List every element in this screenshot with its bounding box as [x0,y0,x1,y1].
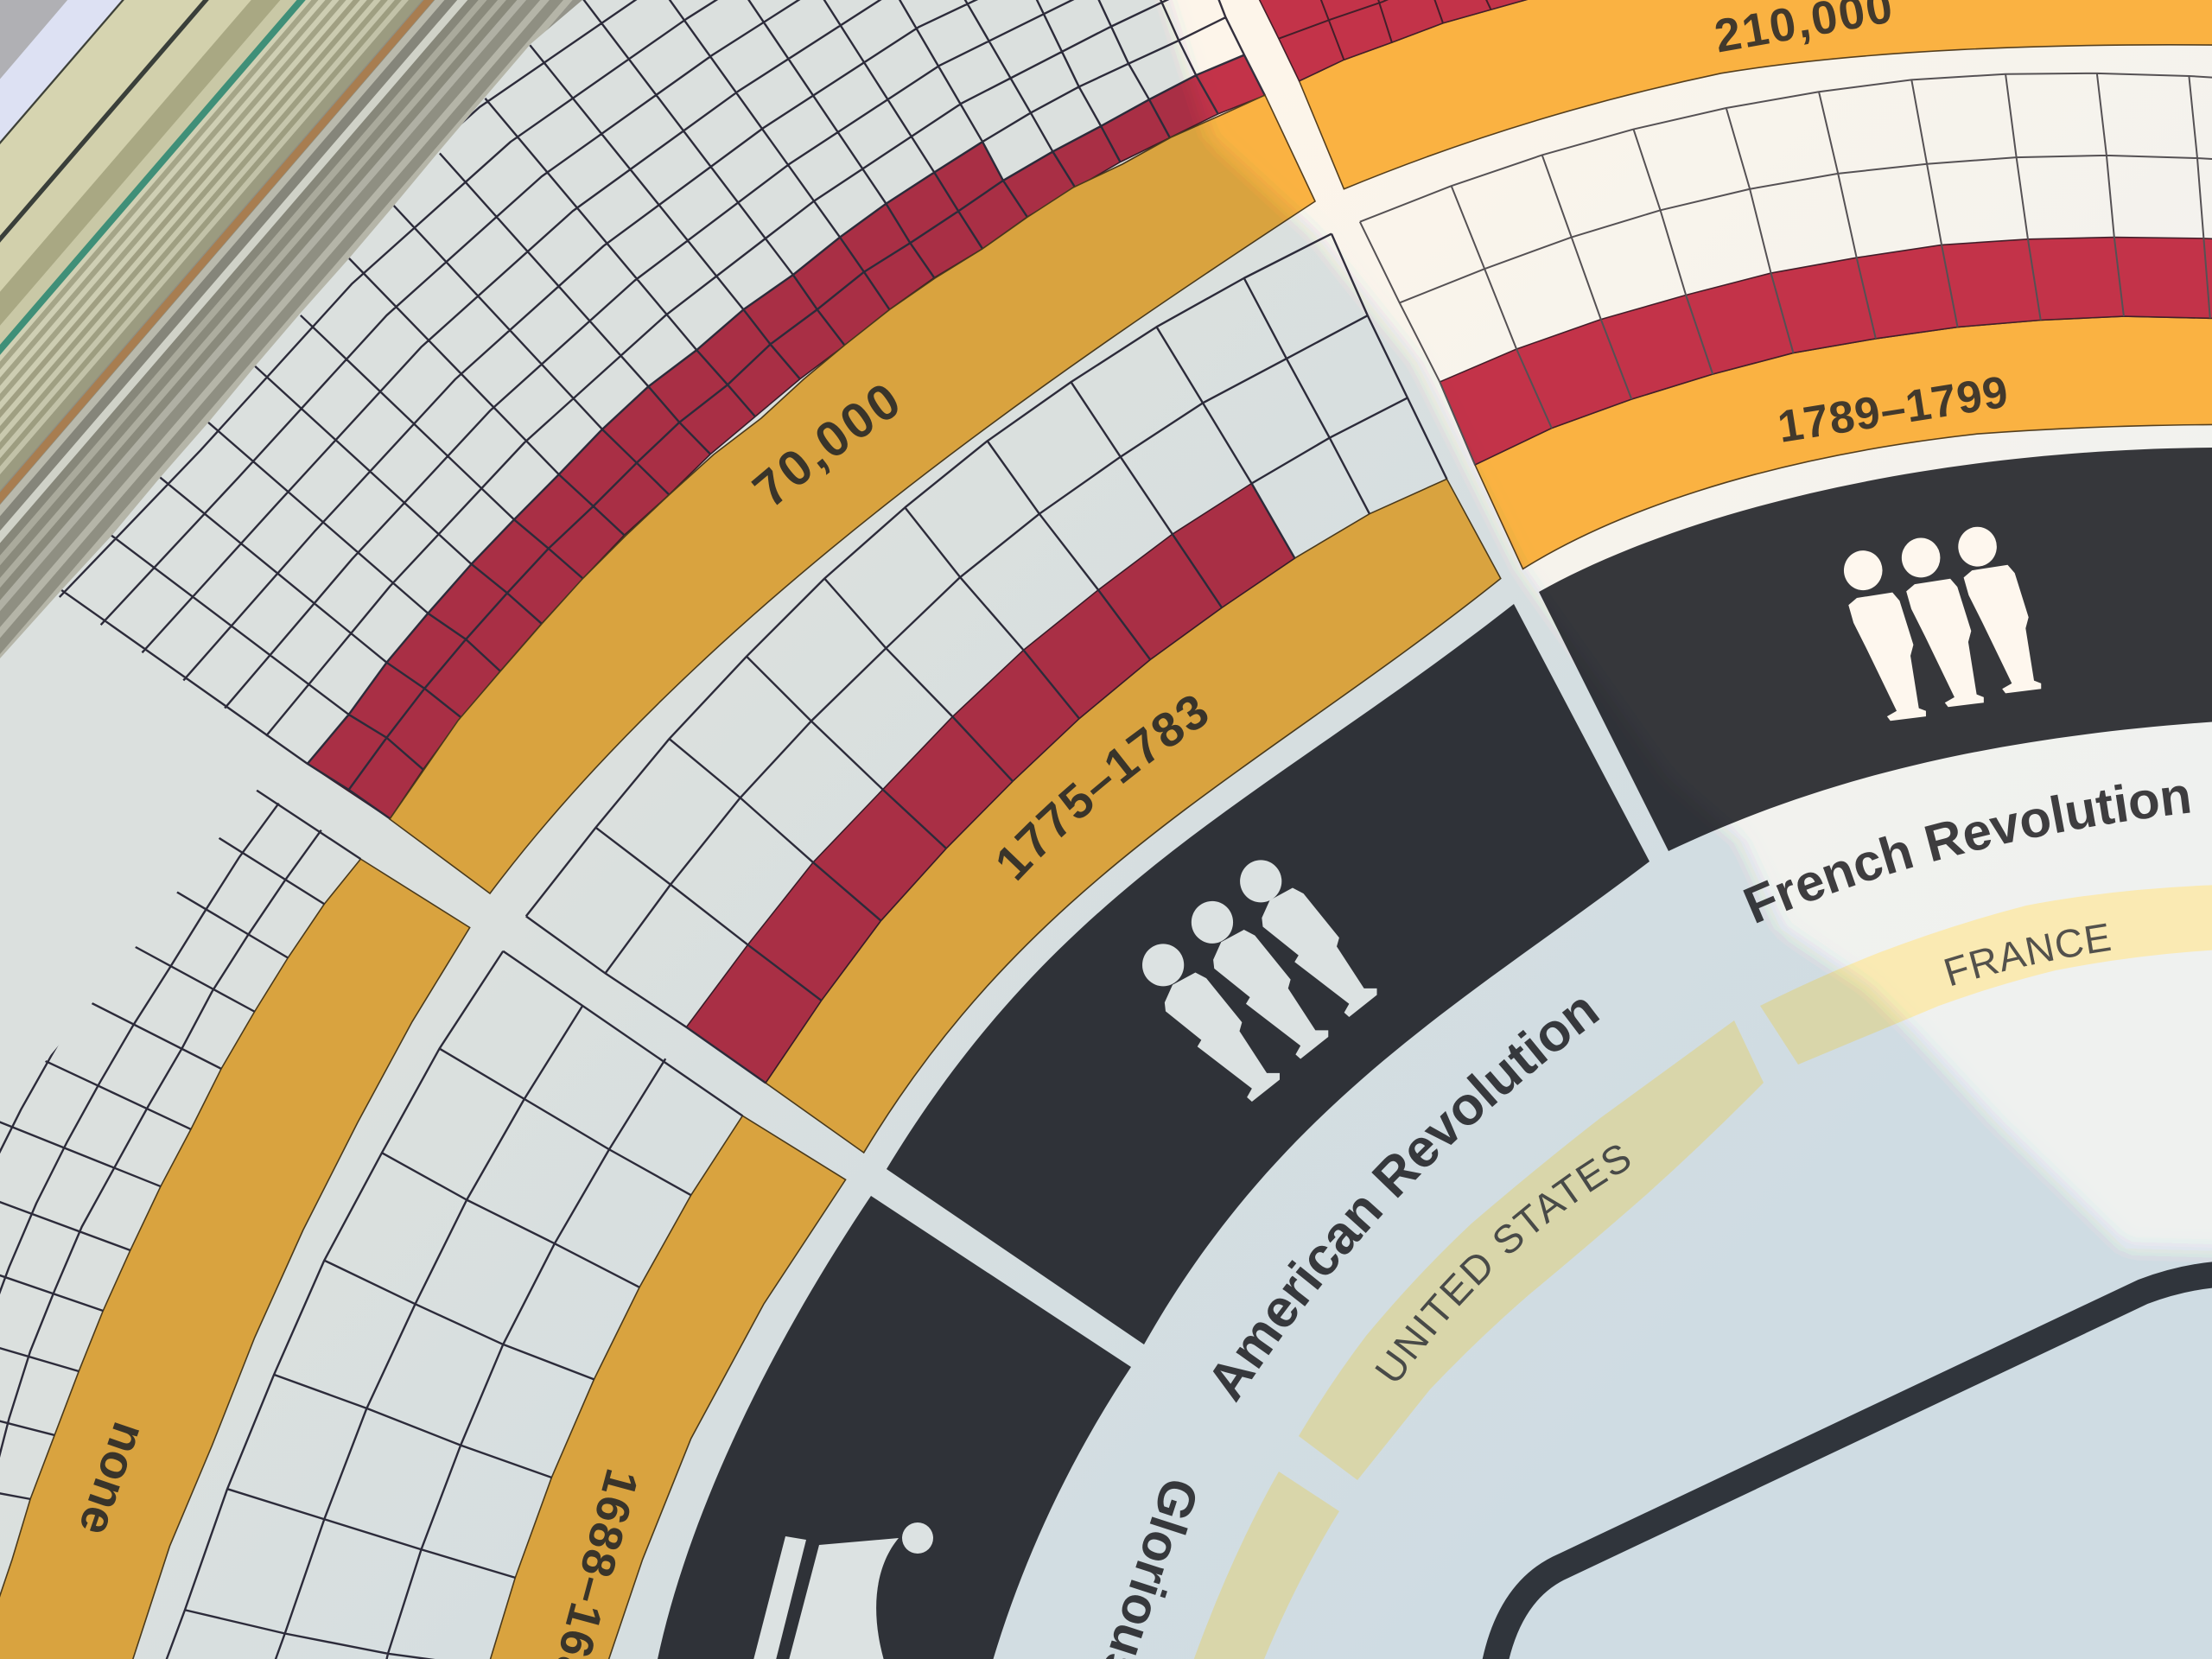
grid of empty cells [0,790,361,1500]
revolution name: American Revolution: American Revolution [1213,1000,1600,1403]
sunlight patch [1149,0,2212,1253]
country band: France [1760,885,2212,1065]
casualties band: 70,000 [390,95,1315,893]
empty and filled grid cells [60,0,1265,818]
grid of empty cells [163,951,742,1659]
panel: 70,000 casualties sector [60,0,1315,893]
icon: figure with hat [753,1522,933,1659]
casualties band: none [0,859,470,1659]
panel: French Revolution icon block [1539,448,2212,851]
casualties band: 210,000 [1300,0,2212,189]
grid of cells [1360,73,2212,465]
cell lines [1279,0,1491,60]
book page edges [0,0,658,716]
dates band [766,479,1501,1153]
dates band [488,1116,846,1659]
dates label: 1789–1799: 1789–1799 [1775,366,2012,453]
panel: American Revolution sector [526,234,1501,1153]
icon: three people [1142,860,1377,1102]
dates band [1475,316,2212,569]
red casualty cells [1440,238,2212,465]
red casualty cells [308,55,1265,818]
panel: Glorious Revolution sector [163,951,846,1659]
panel: 210,000 casualties sector [1257,0,2212,189]
icon: three people [1844,527,2041,721]
panel: English Civil War style sector with no casualties [0,790,471,1659]
country band: Glorious Revolution country [1192,1471,1339,1659]
country band: United States [1299,1020,1764,1480]
central rounded frame [1493,1274,2212,1659]
panel: American Revolution icon block [887,604,1649,1344]
revolution name: French Revolution: French Revolution [1743,784,2190,923]
red casualty cells [686,483,1294,1083]
grid of cells [526,234,1446,1083]
casualty label: none: none [68,1415,157,1542]
casualty label: 70,000: 70,000 [751,385,898,505]
red casualty cells [1257,0,1539,81]
panel: Glorious Revolution icon block [657,1196,1131,1659]
country label: United States: UNITED STATES [1375,1146,1630,1381]
panel: French Revolution sector [1360,73,2212,569]
country label: France: FRANCE [1944,923,2111,986]
dates label: 1775–1783: 1775–1783 [998,696,1208,881]
